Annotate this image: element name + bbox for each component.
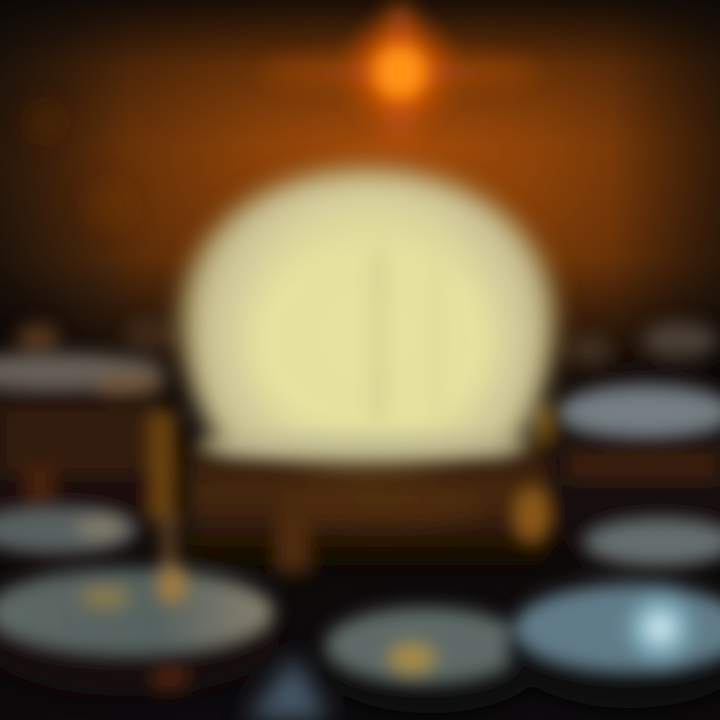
background spots (25, 102, 134, 229)
bottom centre dish (320, 607, 540, 713)
globe: pale glowing sphere (178, 166, 558, 470)
icon: orange star glow (260, 0, 540, 139)
right dish stack (540, 322, 720, 580)
bottom left dish (0, 566, 278, 696)
left dish stack (0, 317, 180, 590)
bottom floor highlight (245, 655, 330, 720)
globe base (188, 405, 554, 573)
bottom right dish (508, 582, 720, 708)
